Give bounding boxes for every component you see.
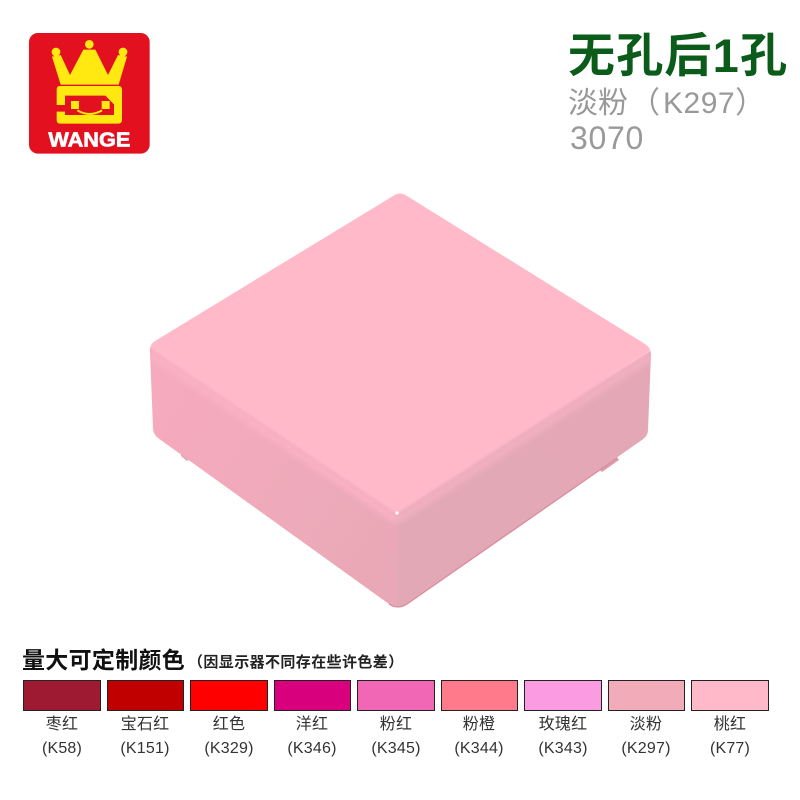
label: K151 [120,715,170,757]
label: K151: 宝石红 [121,716,169,733]
underside tab left [181,451,191,461]
label: K344: 粉橙 [463,716,495,733]
label: K346: (K346) [287,740,337,757]
label: K77 [710,715,750,757]
brick top face [150,194,650,513]
label: K297 [621,715,671,757]
label: K77: 桃红 [714,716,746,733]
text: part number: 3070 [570,120,644,156]
heading: custom colours: 量大可定制颜色 [22,647,185,673]
label: K344: (K344) [454,740,504,757]
label: K345: (K345) [371,740,421,757]
label: K343 [538,715,588,757]
label: K343: (K343) [538,740,588,757]
label: K58 [42,715,82,757]
swatch: K151 [107,680,184,711]
label: K329: (K329) [204,740,254,757]
swatch: K329 [190,680,268,711]
front vertical edge glow [394,515,400,607]
note: display colour difference: （因显示器不同存在些许色差） [188,654,404,671]
brick right face [398,351,651,606]
underside tab right [600,457,619,472]
label: K151: (K151) [120,740,170,757]
label: K297: (K297) [621,740,671,757]
text: colour name and code: 淡粉（K297） [568,87,765,120]
label: K346: 洋红 [296,716,328,733]
brick body [150,194,651,606]
label: K58: (K58) [42,740,82,757]
swatch: K297 [608,680,685,711]
label: K343: 玫瑰红 [539,716,587,733]
label: K344 [454,715,504,757]
label: K345 [371,715,421,757]
swatch: K346 [274,680,351,711]
swatch: K345 [357,680,435,711]
swatch: K344 [441,680,518,711]
swatch: K77 [691,680,769,711]
label: K345: 粉红 [380,716,412,733]
label: K346 [287,715,337,757]
swatch: K343 [524,680,602,711]
left ridge glow [150,354,397,520]
logo: WANGE crown badge: WANGE [48,128,130,151]
right ridge glow [397,356,651,520]
illustration: pink 1x1 tile brick [150,194,651,608]
corner highlight [395,511,399,515]
label: K58: 枣红 [46,716,78,733]
label: K329: 红色 [213,716,245,733]
label: K297: 淡粉 [630,716,662,733]
title: product name: 无孔后1孔 [568,29,788,82]
brick left face [150,346,397,606]
swatch: K58 [23,680,101,711]
label: K77: (K77) [710,740,750,757]
label: K329 [204,715,254,757]
brick bottom edge shadow [389,458,617,607]
logo: WANGE crown badge [29,33,150,154]
